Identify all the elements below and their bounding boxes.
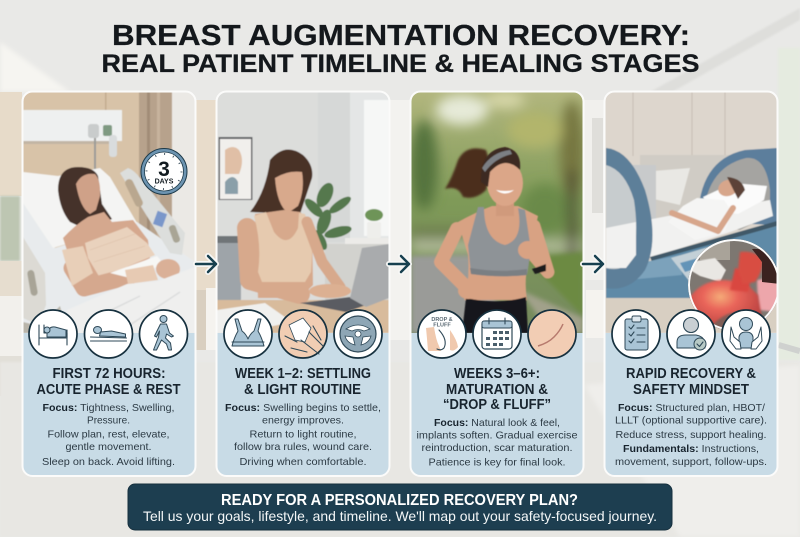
body text: gentle movement.	[66, 441, 152, 453]
heading	[36, 366, 181, 398]
call to action banner: READY FOR A PERSONALIZED RECOVERY PLAN?	[221, 492, 578, 509]
icon: clipboard checklist	[612, 310, 660, 358]
body text: Pressure.	[87, 414, 130, 426]
text panel background	[23, 333, 195, 476]
body text: Fundamentals: Instructions,	[623, 443, 759, 455]
heading	[235, 366, 371, 398]
icon: healing scar	[528, 310, 576, 358]
photo: woman in support bra at laptop	[217, 92, 389, 333]
card outline	[216, 92, 390, 476]
text panel background	[605, 333, 777, 476]
clock badge: 3 days	[141, 148, 187, 194]
heading: “DROP & FLUFF”	[443, 397, 551, 413]
arrow: second to third stage	[389, 256, 409, 272]
icon: supportive hands	[722, 310, 770, 358]
body text: follow bra rules, wound care.	[234, 441, 372, 453]
photo: patient resting in hospital bed	[23, 92, 195, 333]
icon: person with check	[667, 310, 715, 358]
heading: SAFETY MINDSET	[633, 382, 749, 398]
body text: Focus: Tightness, Swelling,	[42, 402, 174, 414]
body text: Sleep on back. Avoid lifting.	[42, 456, 175, 468]
icon: drop and fluff: DROP &	[431, 317, 453, 323]
body text: Reduce stress, support healing.	[616, 429, 766, 441]
body text: Driving when comfortable.	[240, 456, 366, 468]
body text: LLLT (optional supportive care).	[615, 414, 767, 426]
call to action banner	[128, 484, 672, 530]
photo: hyperbaric chamber with red light therapy inset	[605, 92, 783, 340]
icon: wound care hands	[279, 310, 327, 358]
clock badge: 3 days: 3	[158, 158, 170, 181]
body text: Focus: Swelling begins to settle,	[225, 402, 381, 414]
body text: Return to light routine,	[250, 428, 356, 440]
heading: ACUTE PHASE & REST	[36, 382, 181, 398]
photo: woman jogging in park	[410, 92, 584, 333]
icon: hospital bed	[29, 310, 77, 358]
card outline	[22, 92, 196, 476]
arrow: first to second stage	[196, 256, 216, 272]
body text: Focus: Structured plan, HBOT/	[618, 402, 765, 414]
heading: WEEKS 3–6+:	[454, 366, 540, 382]
inset: red light therapy	[688, 239, 776, 330]
icon: calendar	[473, 310, 521, 358]
panel: week 1-2	[216, 92, 390, 476]
title: BREAST AUGMENTATION RECOVERY:	[112, 20, 690, 52]
heading: WEEK 1–2: SETTLING	[235, 366, 371, 382]
icon: drop and fluff: FLUFF	[433, 322, 451, 328]
panel: rapid recovery	[604, 92, 783, 476]
panel: first 72 hours	[22, 92, 196, 476]
body text: Follow plan, rest, elevate,	[48, 428, 170, 440]
body text	[42, 402, 175, 468]
card outline	[604, 92, 778, 476]
icon: support bra	[224, 310, 272, 358]
arrow: third to fourth stage	[583, 256, 603, 272]
heading	[443, 366, 551, 413]
card outline	[410, 92, 584, 476]
call to action banner: Tell us your goals, lifestyle, and timeline. We'll map out your safety-focused journey.	[143, 509, 657, 524]
text panel background	[217, 333, 389, 476]
body text	[416, 417, 578, 468]
body text	[615, 402, 767, 468]
body text: Patience is key for final look.	[428, 456, 566, 468]
icon: steering wheel	[334, 310, 382, 358]
icon: walking figure	[140, 310, 188, 358]
icon: sleeping on back	[84, 310, 132, 358]
heading: & LIGHT ROUTINE	[244, 382, 361, 398]
heading: MATURATION &	[446, 382, 548, 398]
title	[102, 20, 700, 78]
heading: RAPID RECOVERY &	[626, 366, 756, 382]
clock badge: 3 days: DAYS	[155, 178, 174, 186]
body text: implants soften. Gradual exercise	[416, 430, 578, 442]
text panel background	[411, 333, 583, 476]
panel: weeks 3-6+	[410, 92, 584, 476]
heading	[626, 366, 756, 398]
icon: drop and fluff	[418, 310, 466, 358]
body text: movement, support, follow-ups.	[615, 456, 767, 468]
ponytail	[445, 148, 492, 198]
body text: reintroduction, scar maturation.	[422, 442, 572, 454]
body text: energy improves.	[262, 414, 344, 426]
body text	[225, 402, 381, 468]
title: REAL PATIENT TIMELINE & HEALING STAGES	[102, 50, 700, 78]
body text: Focus: Natural look & feel,	[434, 417, 560, 429]
heading: FIRST 72 HOURS:	[52, 366, 166, 382]
